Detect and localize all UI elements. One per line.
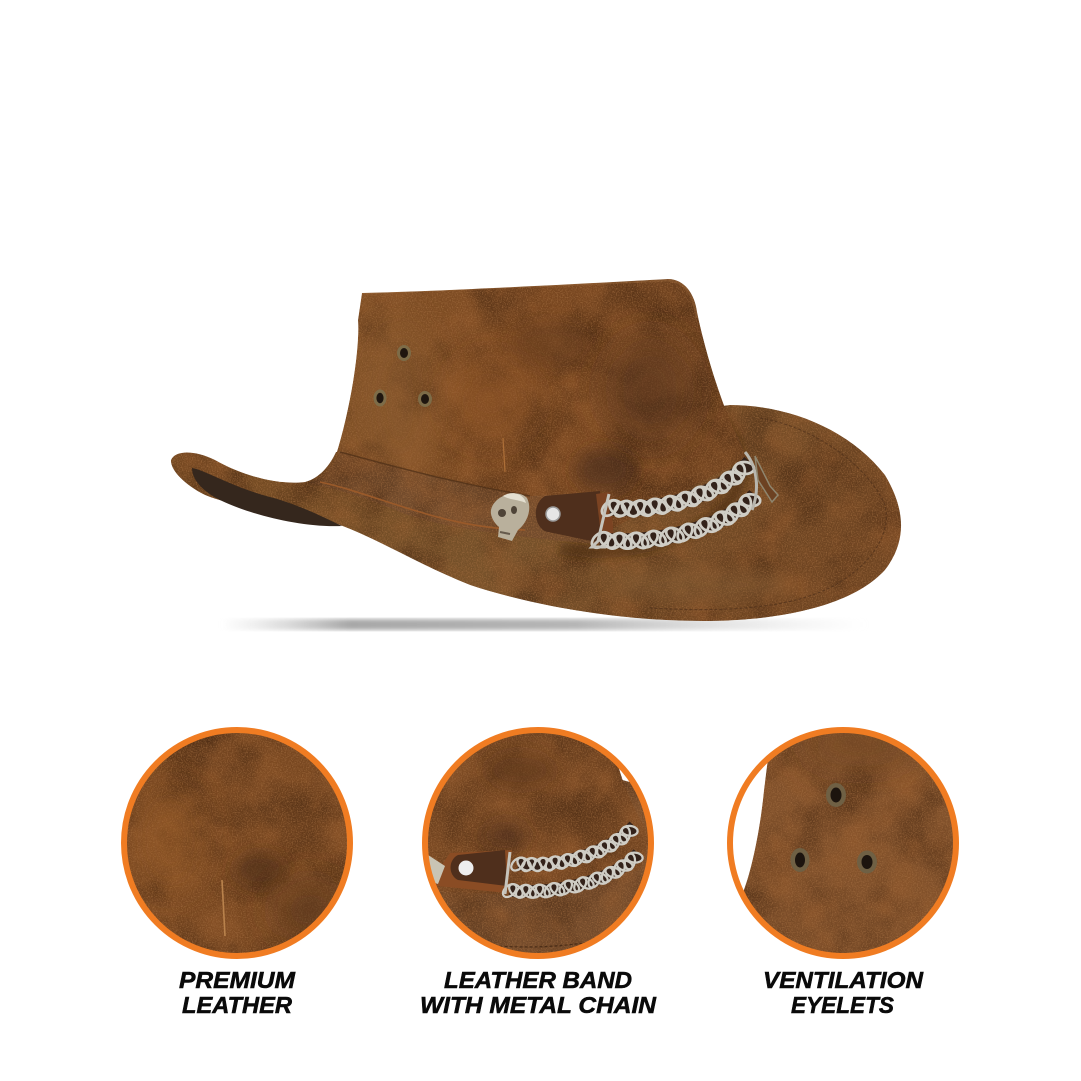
label: ventilation eyelets <box>763 967 924 1018</box>
dark leather tab <box>536 491 606 544</box>
hat brim <box>171 405 901 621</box>
ground shadow <box>220 619 868 630</box>
label: ventilation eyelets: VENTILATION <box>763 967 924 993</box>
label: ventilation eyelets: EYELETS <box>791 992 894 1018</box>
panel: ventilation eyelets <box>720 723 961 962</box>
panel: premium leather <box>120 726 356 962</box>
label: leather band with metal chain: WITH METAL CHAIN <box>420 992 657 1018</box>
crown eyelets <box>374 345 432 407</box>
tab edge <box>596 492 614 543</box>
label: premium leather: PREMIUM <box>179 967 295 993</box>
orange ring <box>124 730 350 956</box>
label: leather band with metal chain: LEATHER BAND <box>444 967 632 993</box>
detail photo: band and chain <box>428 733 648 953</box>
skull ornament <box>491 493 529 541</box>
label: premium leather: LEATHER <box>182 992 292 1018</box>
hat photo illustration <box>171 279 901 621</box>
detail photo: eyelets <box>744 733 953 953</box>
orange ring <box>730 730 956 956</box>
brim underside <box>192 468 342 526</box>
scratch mark <box>503 438 505 472</box>
label: premium leather <box>179 967 295 1018</box>
detail photo: leather texture <box>127 733 347 953</box>
rear strap and ornament <box>755 456 778 502</box>
orange ring <box>425 730 651 956</box>
panel: leather band with metal chain <box>420 726 660 962</box>
brim shading <box>560 420 790 603</box>
leather band <box>307 452 612 545</box>
metal chain <box>589 452 766 552</box>
band top edge <box>340 452 530 496</box>
label: leather band with metal chain <box>420 967 657 1018</box>
rivet <box>546 507 560 521</box>
hat crown <box>336 279 747 535</box>
brim stitching <box>650 418 886 610</box>
band stitch line <box>320 482 525 530</box>
crown shading <box>360 280 697 492</box>
